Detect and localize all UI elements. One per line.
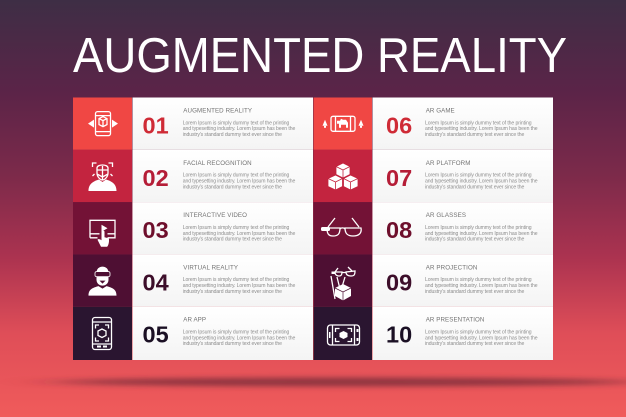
text block: and typesetting industry. Lorem Ipsum has been the <box>425 126 538 132</box>
text block: Lorem Ipsum is simply dummy text of the printing <box>183 277 289 283</box>
icon: AR app <box>92 318 112 350</box>
number 03: 03 <box>142 217 169 243</box>
text block: industry's standard dummy text ever since the <box>183 132 282 138</box>
panel: right column <box>314 98 553 360</box>
text block <box>183 225 295 243</box>
text block <box>425 330 538 347</box>
row 03 <box>73 202 313 254</box>
text block <box>183 277 295 295</box>
text block: and typesetting industry. Lorem Ipsum has been the <box>425 335 538 341</box>
number 06: 06 <box>386 112 412 138</box>
text block: industry's standard dummy text ever since the <box>425 341 524 347</box>
number 08: 08 <box>386 217 412 243</box>
number 10: 10 <box>386 322 412 348</box>
panel: left column <box>73 98 313 360</box>
icon: facial recognition <box>88 163 116 191</box>
text block: industry's standard dummy text ever since the <box>425 132 524 138</box>
row 05 <box>73 307 313 360</box>
text block: Lorem Ipsum is simply dummy text of the printing <box>183 173 289 179</box>
text block <box>425 277 538 295</box>
heading: INTERACTIVE VIDEO <box>183 212 247 219</box>
number 09: 09 <box>386 269 412 295</box>
icon: AR game <box>322 116 364 131</box>
text block: industry's standard dummy text ever since the <box>183 289 282 295</box>
number 05: 05 <box>142 322 169 348</box>
text block: Lorem Ipsum is simply dummy text of the printing <box>425 330 532 336</box>
text block <box>183 173 295 190</box>
row 10 <box>314 307 553 360</box>
icon: AR projection <box>331 267 355 300</box>
text block: Lorem Ipsum is simply dummy text of the printing <box>425 277 532 283</box>
row 02 <box>73 150 313 202</box>
text block: industry's standard dummy text ever since the <box>425 184 524 190</box>
icon: virtual reality <box>88 267 116 296</box>
number 04: 04 <box>142 269 169 295</box>
text block: industry's standard dummy text ever since the <box>183 237 282 243</box>
text block <box>425 225 538 243</box>
text block: and typesetting industry. Lorem Ipsum has been the <box>183 335 295 341</box>
heading: AR APP <box>183 317 206 324</box>
number 07: 07 <box>386 165 412 191</box>
heading: FACIAL RECOGNITION <box>183 160 252 167</box>
text block: Lorem Ipsum is simply dummy text of the printing <box>425 225 532 231</box>
text block: industry's standard dummy text ever since the <box>425 289 524 295</box>
row 04 <box>73 254 313 307</box>
heading: AR PLATFORM <box>426 160 470 167</box>
text block: Lorem Ipsum is simply dummy text of the printing <box>183 330 289 336</box>
text block: and typesetting industry. Lorem Ipsum has been the <box>183 231 295 237</box>
text block: and typesetting industry. Lorem Ipsum has been the <box>425 283 538 289</box>
number 02: 02 <box>142 165 169 191</box>
number 01: 01 <box>142 112 169 138</box>
title: AUGMENTED REALITY <box>73 29 567 83</box>
icon: interactive video <box>90 220 115 247</box>
heading: AR GAME <box>426 108 455 114</box>
row 01 <box>73 98 313 150</box>
row 08 <box>314 202 553 254</box>
text block: Lorem Ipsum is simply dummy text of the printing <box>183 225 289 231</box>
text block: and typesetting industry. Lorem Ipsum has been the <box>425 178 538 184</box>
text block: Lorem Ipsum is simply dummy text of the printing <box>425 120 532 126</box>
text block <box>425 120 538 138</box>
row 09 <box>314 254 553 307</box>
icon: AR phone <box>88 112 118 136</box>
icon: AR glasses <box>321 218 361 236</box>
text block: industry's standard dummy text ever since the <box>425 237 524 243</box>
text block: Lorem Ipsum is simply dummy text of the printing <box>425 173 532 179</box>
heading: VIRTUAL REALITY <box>183 264 238 271</box>
text block <box>183 120 295 138</box>
heading: AUGMENTED REALITY <box>183 108 252 114</box>
text block: Lorem Ipsum is simply dummy text of the printing <box>183 120 289 126</box>
icon: AR presentation <box>328 325 360 345</box>
heading: AR PROJECTION <box>426 264 477 271</box>
text block: and typesetting industry. Lorem Ipsum has been the <box>183 283 295 289</box>
icon: AR platform cubes <box>328 163 358 190</box>
text block: and typesetting industry. Lorem Ipsum has been the <box>183 178 295 184</box>
row 06 <box>314 98 553 150</box>
floor shadow <box>55 378 626 386</box>
heading: AR GLASSES <box>426 212 466 219</box>
row 07 <box>314 150 553 202</box>
text block: industry's standard dummy text ever since the <box>183 184 282 190</box>
text block: industry's standard dummy text ever since the <box>183 341 282 347</box>
text block <box>425 173 538 190</box>
text block <box>183 330 295 347</box>
text block: and typesetting industry. Lorem Ipsum has been the <box>183 126 295 132</box>
heading: AR PRESENTATION <box>426 317 484 324</box>
text block: and typesetting industry. Lorem Ipsum has been the <box>425 231 538 237</box>
